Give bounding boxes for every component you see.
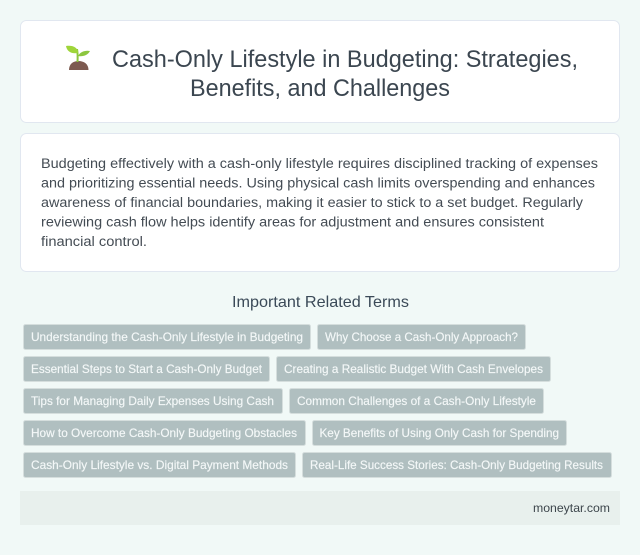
tag	[302, 452, 612, 478]
tag	[24, 388, 282, 414]
tag	[24, 452, 296, 478]
title	[112, 46, 578, 102]
tag: Essential Steps to Start a Cash-Only Budget	[31, 362, 263, 376]
title: Benefits, and Challenges	[190, 75, 450, 102]
tag: How to Overcome Cash-Only Budgeting Obstacles	[31, 426, 297, 440]
tag	[276, 356, 550, 382]
panel: title card	[20, 20, 620, 122]
footer: moneytar.com	[533, 501, 610, 515]
tag: Key Benefits of Using Only Cash for Spending	[320, 426, 559, 440]
text block: description: Budgeting effectively with a cash-only lifestyle requires disciplined tracking of expenses	[41, 156, 598, 172]
text block: description	[41, 156, 598, 250]
title: Cash-Only Lifestyle in Budgeting: Strategies,	[112, 46, 578, 73]
tag: Real-Life Success Stories: Cash-Only Budgeting Results	[310, 458, 603, 472]
text block: description: reviewing cash flow helps identify areas for adjustment and ensures consistent	[41, 214, 544, 230]
tag	[24, 420, 306, 446]
panel: description	[20, 134, 620, 272]
tag: Cash-Only Lifestyle vs. Digital Payment Methods	[31, 458, 288, 472]
text block: description: financial control.	[41, 234, 147, 250]
heading: related terms: Important Related Terms	[232, 294, 409, 311]
tag	[312, 420, 566, 446]
tag	[24, 356, 270, 382]
tag: Understanding the Cash-Only Lifestyle in Budgeting	[31, 330, 303, 344]
icon: seedling	[66, 46, 90, 70]
panel: related term tags	[24, 324, 612, 478]
tag: Creating a Realistic Budget With Cash Envelopes	[284, 362, 543, 376]
tag	[290, 388, 544, 414]
tag	[318, 324, 526, 350]
tag: Why Choose a Cash-Only Approach?	[325, 330, 518, 344]
tag: Common Challenges of a Cash-Only Lifestyle	[297, 394, 536, 408]
text block: description: and prioritizing essential needs. Using physical cash limits overspending and enhances	[41, 176, 595, 192]
footer	[20, 491, 620, 525]
tag: Tips for Managing Daily Expenses Using Cash	[31, 394, 274, 408]
tag	[24, 324, 310, 350]
text block: description: awareness of financial boundaries, making it easier to stick to a set budget. Regularly	[41, 195, 584, 211]
